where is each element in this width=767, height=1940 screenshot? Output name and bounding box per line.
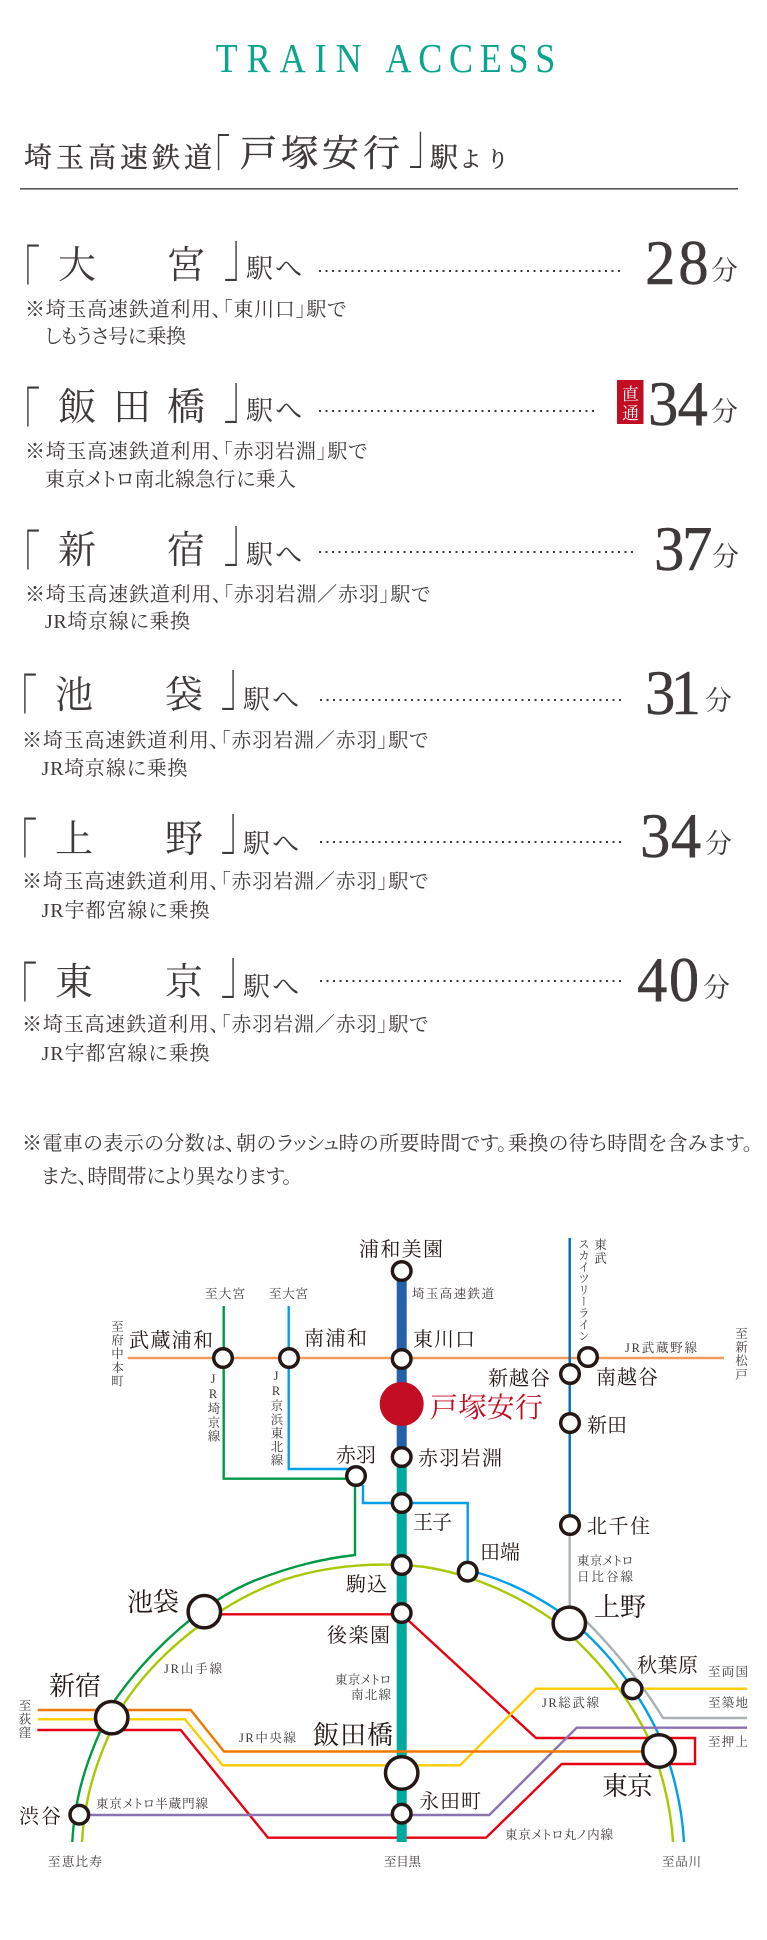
- route row: Ikebukuro: 袋: [165, 675, 203, 717]
- route row: Iidabashi: 田: [113, 387, 151, 429]
- line and direction labels: 日比谷線: [577, 1570, 633, 1584]
- route row: Ikebukuro: 31: [645, 657, 701, 728]
- route row: Tokyo: 」: [221, 939, 240, 1006]
- station labels: 後楽園: [327, 1624, 390, 1647]
- route row: Shinjuku: 分: [712, 542, 739, 572]
- badge: direct service: [617, 380, 644, 424]
- station labels: 新田: [587, 1414, 627, 1437]
- line and direction labels: 東京メトロ半蔵門線: [96, 1796, 208, 1811]
- route row: Ikebukuro: 「: [18, 671, 37, 738]
- badge: direct service: 通: [622, 404, 639, 423]
- station labels: 南浦和: [304, 1327, 367, 1350]
- line: Namboku: [397, 1457, 407, 1842]
- line: Keihin-Tohoku: [289, 1306, 684, 1842]
- line and direction labels: 南北線: [351, 1687, 391, 1702]
- footnote: また、時間帯により異なります。: [42, 1165, 292, 1188]
- station labels: 新宿: [49, 1672, 101, 1701]
- heading: origin station: 戸塚安行: [240, 133, 400, 175]
- station labels: 渋谷: [19, 1805, 61, 1828]
- route row: Iidabashi: 「: [21, 384, 40, 451]
- route map: [17, 1237, 748, 1869]
- route row: Iidabashi: 駅へ: [245, 396, 302, 426]
- route row: Shinjuku: JR埼京線に乗換: [45, 610, 190, 633]
- route row: Ueno: 「: [18, 815, 37, 882]
- line and direction labels: JR中央線: [239, 1730, 296, 1745]
- line and direction labels: 至両国: [708, 1665, 748, 1679]
- route row: Ikebukuro: ※埼玉高速鉄道利用、「赤羽岩淵／赤羽」駅で: [22, 729, 428, 752]
- route row: Omiya: しもうさ号に乗換: [45, 325, 186, 348]
- route row: Omiya: 分: [711, 256, 738, 286]
- line: Marunouchi: [37, 1614, 695, 1838]
- line: Hanzomon: [79, 1728, 747, 1815]
- route row: Ueno: [18, 795, 732, 922]
- line and direction labels: 東武: [592, 1237, 607, 1265]
- route row: Ueno: 駅へ: [242, 829, 299, 859]
- line and direction labels: 至品川: [662, 1855, 701, 1869]
- line and direction labels: 至府中本町: [110, 1320, 124, 1388]
- route row: Iidabashi: 34: [648, 368, 708, 439]
- heading: origin station: より: [462, 147, 506, 172]
- line and direction labels: JR武蔵野線: [625, 1340, 697, 1355]
- station labels: 戸塚安行: [430, 1392, 543, 1424]
- line and direction labels: 至築地: [708, 1695, 748, 1710]
- route row: Ueno: ※埼玉高速鉄道利用、「赤羽岩淵／赤羽」駅で: [22, 870, 428, 893]
- line and direction labels: 東京メトロ: [577, 1553, 633, 1568]
- station labels: 永田町: [419, 1790, 481, 1813]
- route row: Ueno: 上: [55, 819, 93, 861]
- route row: Tokyo: 「: [18, 959, 37, 1026]
- route row: Ikebukuro: 分: [705, 686, 732, 716]
- line and direction labels: 至押上: [708, 1734, 748, 1749]
- line: Saitama Rapid: [397, 1271, 407, 1457]
- line and direction labels: [17, 1237, 748, 1869]
- title: TRAIN: [216, 37, 362, 82]
- heading: origin station: [24, 115, 506, 194]
- line and direction labels: スカイツリーライン: [577, 1238, 589, 1342]
- line and direction labels: JR京浜東北線: [269, 1369, 283, 1467]
- line and direction labels: JR埼京線: [206, 1372, 220, 1443]
- stations: [70, 1262, 675, 1824]
- station labels: 武蔵浦和: [129, 1329, 213, 1352]
- route row: Shinjuku: ※埼玉高速鉄道利用、「赤羽岩淵／赤羽」駅で: [25, 583, 430, 606]
- station labels: 上野: [594, 1593, 646, 1622]
- station labels: 新越谷: [488, 1367, 550, 1390]
- route row: Shinjuku: 駅へ: [245, 540, 302, 570]
- route row: Ikebukuro: [18, 651, 732, 780]
- line and direction labels: 至恵比寿: [48, 1854, 102, 1869]
- station labels: 北千住: [587, 1515, 650, 1538]
- station labels: 南越谷: [596, 1366, 658, 1389]
- route row: Ikebukuro: 池: [55, 675, 93, 717]
- station labels: 浦和美園: [359, 1238, 443, 1261]
- route row: Iidabashi: ※埼玉高速鉄道利用、「赤羽岩淵」駅で: [25, 440, 367, 463]
- station labels: 東川口: [413, 1328, 475, 1351]
- line and direction labels: 埼玉高速鉄道: [412, 1286, 494, 1301]
- line and direction labels: 至大宮: [269, 1286, 308, 1301]
- title: [216, 37, 555, 82]
- line and direction labels: JR山手線: [164, 1662, 222, 1676]
- route row: Omiya: 駅へ: [245, 254, 302, 284]
- heading: origin station: 」: [409, 115, 427, 177]
- line: Skytree: [569, 1238, 571, 1525]
- route row: Omiya: 」: [224, 222, 243, 289]
- route row: Tokyo: 京: [165, 962, 203, 1004]
- route row: Ikebukuro: JR埼京線に乗換: [42, 757, 188, 780]
- title: ACCESS: [386, 37, 555, 82]
- route row: Shinjuku: 「: [21, 527, 40, 594]
- route row: Tokyo: ※埼玉高速鉄道利用、「赤羽岩淵／赤羽」駅で: [22, 1013, 428, 1036]
- route row: Ueno: 34: [640, 800, 701, 871]
- line and direction labels: 東京メトロ: [335, 1672, 391, 1687]
- line and direction labels: JR総武線: [542, 1695, 599, 1710]
- station labels: 東京: [602, 1772, 653, 1801]
- heading: origin station: 「: [212, 132, 230, 194]
- route row: Ueno: 」: [221, 795, 240, 862]
- route row: Omiya: 大: [58, 245, 96, 287]
- route row: Omiya: 「: [21, 242, 40, 309]
- line: Hibiya: [570, 1525, 747, 1718]
- route row: Omiya: 28: [645, 227, 709, 298]
- route row: Iidabashi: 東京メトロ南北線急行に乗入: [45, 468, 296, 491]
- line: Chuo: [38, 1710, 659, 1752]
- icon: current station marker: [380, 1382, 424, 1426]
- station labels: 赤羽岩淵: [418, 1447, 502, 1470]
- route row: Ueno: 分: [705, 829, 732, 859]
- station labels: 駒込: [345, 1573, 387, 1596]
- route row: Omiya: [21, 222, 738, 348]
- station labels: 田端: [480, 1541, 520, 1564]
- route row: Iidabashi: 分: [711, 397, 738, 427]
- line: Saikyo: [72, 1306, 356, 1842]
- line and direction labels: 至新松戸: [734, 1327, 748, 1381]
- route row: Shinjuku: 新: [58, 530, 96, 572]
- route row: Omiya: ※埼玉高速鉄道利用、「東川口」駅で: [25, 298, 346, 321]
- route row: Shinjuku: 37: [654, 513, 712, 584]
- route row: Iidabashi: 飯: [58, 387, 96, 429]
- station labels: 赤羽: [336, 1444, 376, 1467]
- route row: Ikebukuro: 」: [221, 651, 240, 718]
- line and direction labels: 至大宮: [205, 1286, 245, 1301]
- route row: Shinjuku: 」: [224, 507, 243, 574]
- station labels: [19, 1238, 698, 1828]
- route row: Tokyo: 40: [637, 944, 699, 1015]
- line: Musashino: [128, 1357, 724, 1359]
- route row: Shinjuku: [21, 507, 739, 633]
- line and direction labels: 至荻窪: [17, 1699, 31, 1740]
- route row: Ikebukuro: 駅へ: [242, 685, 299, 715]
- route row: Tokyo: 分: [703, 973, 730, 1003]
- route row: Iidabashi: 」: [224, 364, 243, 431]
- line: Sobu: [38, 1689, 747, 1765]
- route row: Tokyo: 駅へ: [242, 972, 299, 1002]
- route row: Tokyo: JR宇都宮線に乗換: [42, 1042, 210, 1065]
- heading: origin station: 埼玉高速鉄道: [24, 142, 212, 174]
- footnote: [22, 1132, 753, 1188]
- line and direction labels: 東京メトロ丸ノ内線: [505, 1827, 613, 1842]
- route row: Iidabashi: [21, 364, 738, 491]
- station labels: 池袋: [127, 1588, 179, 1617]
- route row: Shinjuku: 宿: [167, 530, 205, 572]
- line and direction labels: 至目黒: [384, 1855, 421, 1869]
- route row: Ueno: 野: [165, 819, 203, 861]
- badge: direct service: 直: [622, 385, 639, 404]
- station labels: 飯田橋: [313, 1721, 393, 1750]
- route row: Tokyo: [18, 939, 730, 1065]
- station labels: 王子: [413, 1512, 452, 1534]
- line: Yamanote: [82, 1565, 673, 1842]
- station labels: 秋葉原: [637, 1654, 698, 1677]
- heading: origin station: 駅: [429, 143, 458, 174]
- route row: Ueno: JR宇都宮線に乗換: [42, 899, 210, 922]
- route row: Iidabashi: 橋: [167, 387, 205, 429]
- footnote: ※電車の表示の分数は、朝のラッシュ時の所要時間です。乗換の待ち時間を含みます。: [22, 1132, 753, 1155]
- route row: Omiya: 宮: [167, 245, 205, 287]
- route row: Tokyo: 東: [55, 962, 93, 1004]
